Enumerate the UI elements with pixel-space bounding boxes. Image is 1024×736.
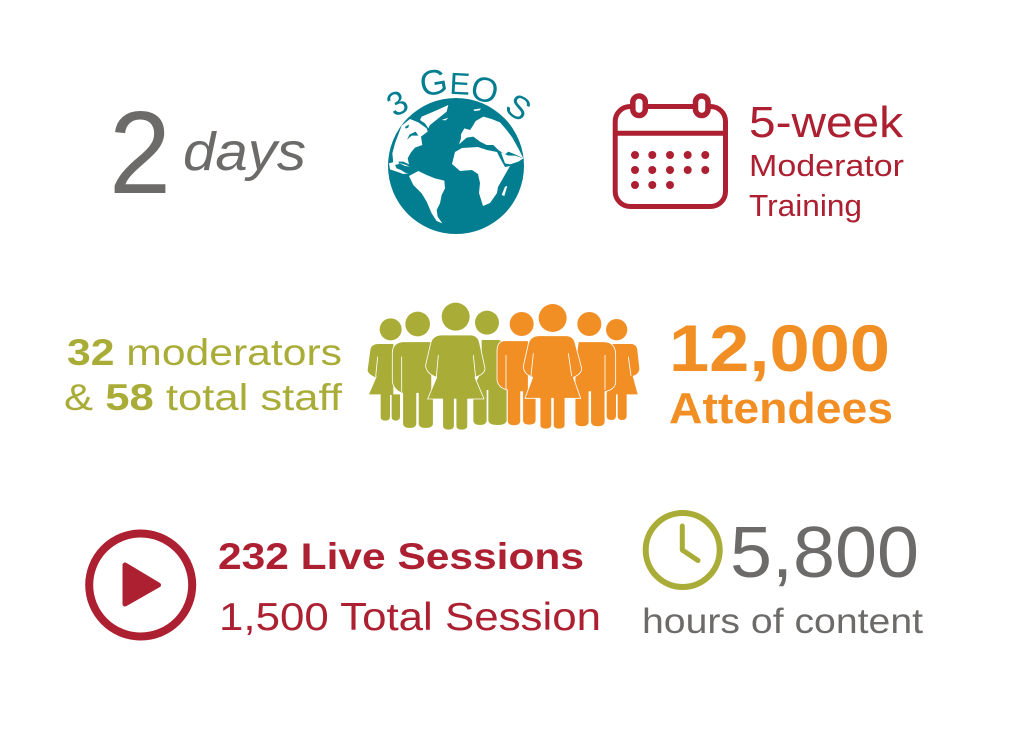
stat: 5-week moderator training: 5-week [749,98,904,147]
stat: moderators and staff: 32 moderators [67,332,342,373]
label: 3 GEOS: O [467,69,502,112]
stat: sessions: 1,500 Total Session [219,596,601,639]
icon: crowd of people [368,303,639,430]
label: 3 GEOS [381,61,538,128]
stat: 12,000 attendees: Attendees [669,384,893,433]
label: 3 GEOS: S [499,86,538,128]
stat: 12,000 attendees: 12,000 [669,311,890,385]
stat: 5,800 hours of content [642,513,923,641]
stat: moderators and staff: & 58 total staff [64,377,343,418]
stat: 2 days: days [183,122,306,182]
icon: play button [89,534,192,636]
green people [368,303,507,430]
label: 3 GEOS: E [449,67,471,102]
stat: 2 days [109,87,306,218]
stat: sessions: 232 Live Sessions [218,536,584,577]
stat: 5,800 hours of content: 5,800 [730,513,919,593]
stat: 5-week moderator training: Training [749,188,862,223]
label: 3 GEOS: G [417,61,451,105]
stat: 5-week moderator training [749,98,904,223]
icon: clock [646,513,720,587]
stat: 2 days: 2 [109,87,171,218]
stat: 5,800 hours of content: hours of content [642,602,923,641]
orange people [497,304,639,429]
stat: moderators and staff [64,332,343,418]
stat: 5-week moderator training: Moderator [749,148,904,183]
stat: sessions [218,536,601,639]
label: 3 GEOS: 3 [381,83,415,125]
icon: globe with 3 GEOS [381,61,538,234]
stat: 12,000 attendees [669,311,893,433]
icon: calendar [615,96,726,206]
